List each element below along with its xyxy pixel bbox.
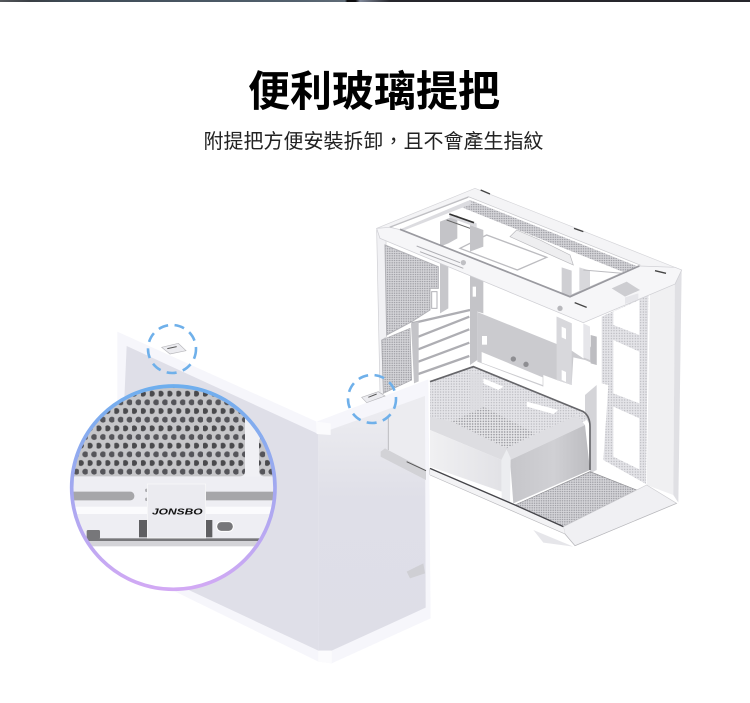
shroud right face [510, 425, 590, 503]
glass side panel [117, 332, 431, 663]
motherboard tray plate [477, 312, 597, 387]
rear cutout handle on top frame [612, 282, 640, 304]
rear vertical post [470, 225, 483, 365]
right side wedge [647, 284, 675, 495]
left frame column [377, 230, 387, 393]
left upright [440, 222, 448, 313]
right rear mesh [602, 295, 648, 484]
small square hole [87, 530, 100, 539]
dashed highlight circle left [148, 325, 196, 373]
lower left mesh [382, 328, 412, 393]
see-through interior [381, 396, 426, 578]
shroud front face [430, 430, 502, 492]
centre right post [583, 323, 597, 473]
bottom frame [563, 485, 677, 546]
subtitle: 附提把方便安裝拆卸，且不會產生指紋 [204, 131, 544, 153]
magnified detail lens [67, 385, 282, 590]
handle tab [147, 484, 206, 538]
dark hinge openings [139, 520, 147, 537]
front top bar [377, 227, 682, 323]
JONSBO logo: JONSBO [152, 507, 203, 517]
shroud chamfered pillar [502, 449, 511, 503]
glass bottom corner [318, 651, 332, 663]
lens gradient ring [72, 386, 275, 589]
left rear mesh plate [385, 245, 438, 335]
oval hole [217, 522, 233, 531]
shroud front rim [430, 417, 510, 460]
lower metal strip [74, 482, 273, 538]
dashed highlight circle right [348, 375, 396, 423]
floor mesh [515, 472, 637, 527]
glass corner highlight [316, 422, 331, 435]
glass right face [318, 396, 426, 651]
expansion slot frame [411, 310, 470, 383]
left glass handle [162, 343, 186, 354]
lower side rail [430, 468, 565, 534]
slots [67, 492, 134, 500]
product illustration [70, 188, 682, 663]
bottom edge [67, 538, 280, 541]
power supply shroud [430, 367, 590, 503]
computer case frame [377, 188, 682, 547]
lens background [71, 385, 276, 590]
perforated metal [241, 418, 263, 476]
top image strip [0, 0, 750, 2]
shroud upper chamfer [507, 415, 585, 460]
glass outer frame [117, 332, 431, 663]
top frame and opening [377, 188, 682, 323]
title: 便利玻璃提把 [248, 68, 500, 115]
glass left face [117, 346, 318, 651]
foot [533, 530, 573, 547]
case silhouette [377, 188, 682, 546]
left rail behind glass [380, 450, 430, 475]
right glass handle [362, 392, 385, 403]
